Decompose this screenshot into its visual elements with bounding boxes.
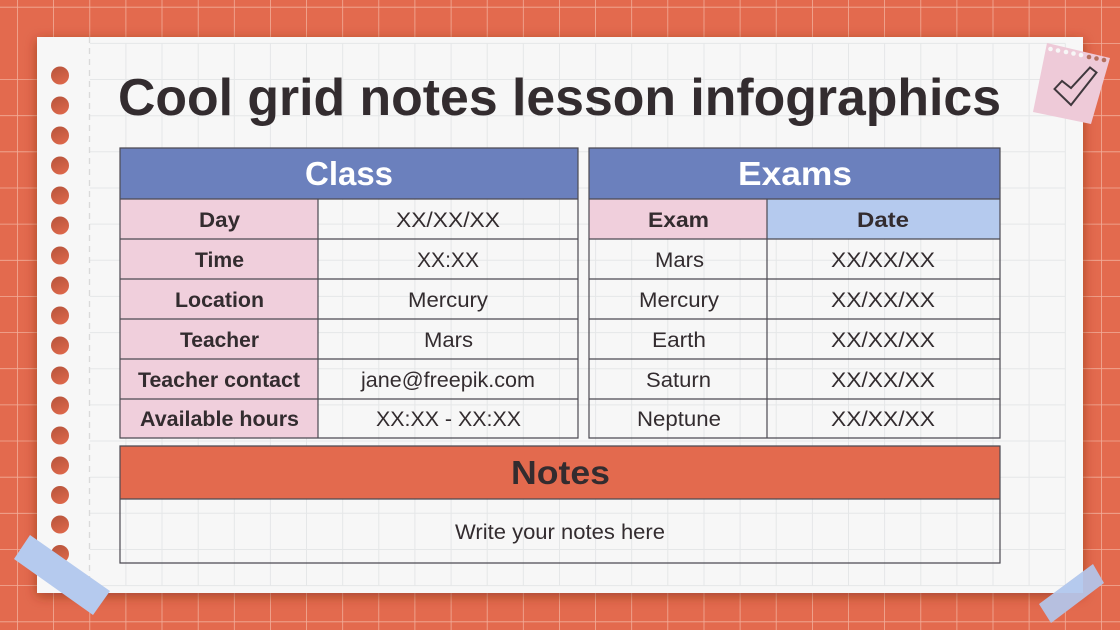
exam names: Mars [655, 249, 704, 272]
exam dates [831, 249, 935, 431]
exam names: Mercury [639, 289, 720, 312]
notes header: Notes [511, 454, 610, 491]
class row values [360, 209, 535, 431]
date column heading [767, 199, 1000, 239]
tape: bottom left [14, 535, 110, 615]
exams header: Exams [738, 155, 852, 192]
punched holes [51, 66, 69, 563]
notes body text: Write your notes here [455, 521, 665, 544]
exam names: Earth [652, 329, 706, 352]
class row labels: Available hours [140, 408, 299, 431]
exam dates: XX/XX/XX [831, 329, 935, 352]
exam names [637, 249, 721, 431]
class row labels: Time [195, 249, 244, 272]
tape: bottom right [1039, 564, 1104, 623]
class row labels: Teacher [180, 329, 259, 352]
class row values: XX:XX [417, 249, 479, 272]
exams column titles: Date [857, 209, 909, 232]
table: exams [589, 148, 1000, 438]
class row values: Mars [424, 329, 473, 352]
exam dates: XX/XX/XX [831, 289, 935, 312]
class row values: XX/XX/XX [396, 209, 500, 232]
notes header [120, 446, 1000, 499]
exams column titles [648, 209, 909, 232]
panel: notes [120, 446, 1000, 563]
exam dates: XX/XX/XX [831, 249, 935, 272]
class row labels: Location [175, 289, 264, 312]
class row labels background [120, 199, 318, 438]
sticky note perforations [1048, 47, 1106, 62]
class row values: jane@freepik.com [360, 369, 535, 392]
class header: Class [305, 155, 393, 192]
sticky note with check mark [1033, 43, 1110, 124]
class row values: XX:XX - XX:XX [376, 408, 521, 431]
icon: check mark [1054, 68, 1096, 105]
class row labels: Day [199, 209, 240, 232]
class row labels [138, 209, 300, 431]
exam dates: XX/XX/XX [831, 369, 935, 392]
title: Cool grid notes lesson infographics [118, 69, 1001, 127]
exam column heading [589, 199, 767, 239]
exams column titles: Exam [648, 209, 709, 232]
class row values: Mercury [408, 289, 489, 312]
exam names: Neptune [637, 408, 721, 431]
table: class [120, 148, 578, 438]
exam names: Saturn [646, 369, 711, 392]
exams header [589, 148, 1000, 199]
class row labels: Teacher contact [138, 369, 300, 392]
exam dates: XX/XX/XX [831, 408, 935, 431]
class header [120, 148, 578, 199]
